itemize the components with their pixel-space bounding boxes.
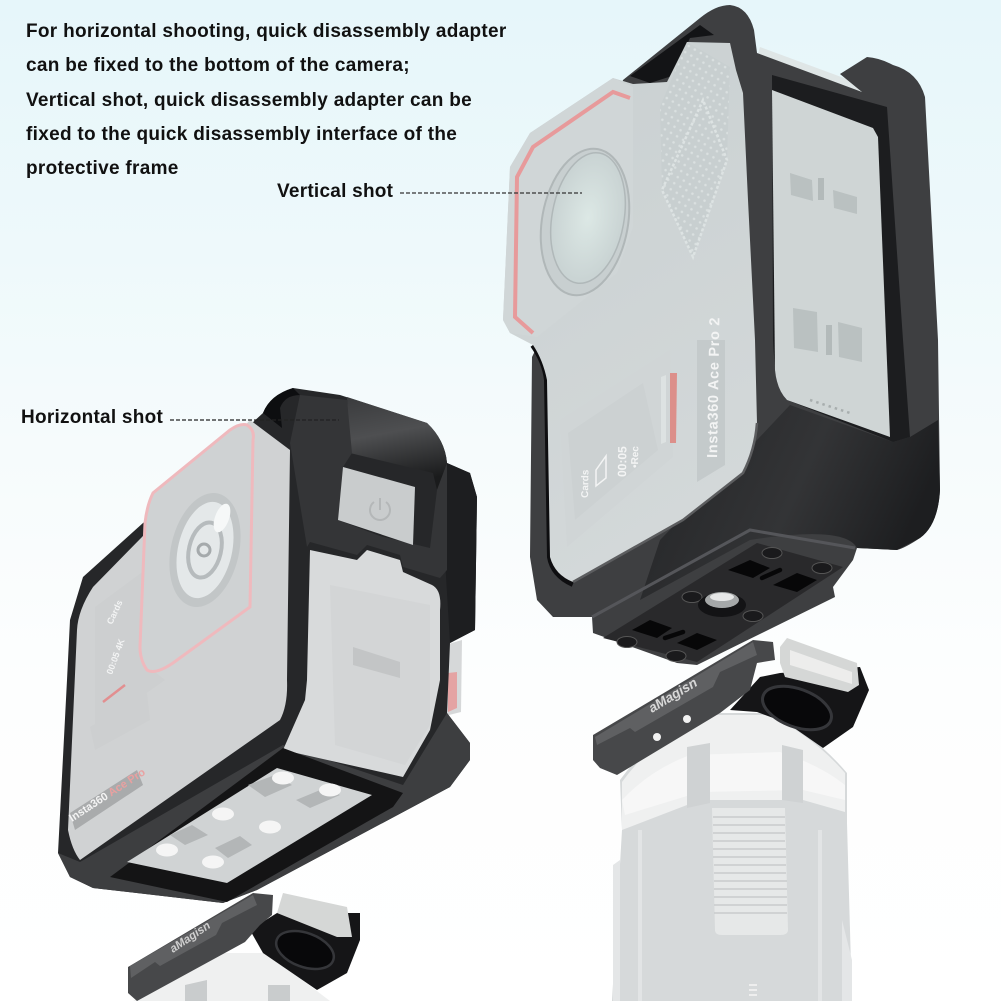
- intro text block: Vertical shot, quick disassembly adapter can be: [26, 90, 472, 111]
- protective frame, vertical: [530, 5, 940, 665]
- front face: [68, 420, 290, 860]
- tripod head under horizontal camera: [133, 953, 330, 1001]
- power button: [338, 467, 415, 545]
- intro text block: can be fixed to the bottom of the camera;: [26, 55, 410, 76]
- label: horizontal shot: Horizontal shot: [21, 407, 163, 428]
- camera body, horizontal: [67, 420, 440, 902]
- intro text block: protective frame: [26, 158, 179, 179]
- mesh grille: [660, 42, 730, 257]
- leader line: horizontal shot: [170, 419, 339, 421]
- adapter brand label, horizontal: aMagisn: [168, 920, 213, 955]
- screen time text: 00:05 4K: [104, 637, 127, 676]
- horizontal shot camera assembly: [58, 388, 477, 1001]
- camera body, vertical: [503, 42, 757, 584]
- screen card text: Cards: [580, 469, 592, 498]
- hinge barrel: [347, 397, 447, 490]
- vertical shot camera assembly: [503, 5, 940, 1001]
- protective frame, horizontal: [58, 388, 477, 903]
- intro text block: fixed to the quick disassembly interface of the: [26, 124, 457, 145]
- quick release adapter, horizontal: [128, 893, 360, 1001]
- label: vertical shot: Vertical shot: [277, 181, 393, 202]
- lens module, horizontal: [140, 425, 253, 671]
- screen record text: •Rec: [630, 446, 641, 468]
- adapter brand label: aMagisn: [646, 675, 700, 716]
- leader line: vertical shot: [400, 192, 582, 194]
- mounting plate: [592, 530, 855, 662]
- brand label: Insta360 Ace Pro: [67, 766, 148, 825]
- intro text block: [26, 21, 507, 179]
- screen text: Cards: [105, 598, 125, 626]
- intro text block: For horizontal shooting, quick disassembly adapter: [26, 21, 507, 42]
- screen text: 00:05: [615, 446, 630, 477]
- tripod head under vertical camera: [612, 713, 852, 1001]
- camera brand label: Insta360 Ace Pro 2: [705, 317, 723, 458]
- camera details panel: [560, 350, 673, 547]
- quick release adapter, vertical: [593, 638, 869, 775]
- bottom plate: [110, 748, 403, 902]
- lens module: [503, 78, 633, 337]
- brand label strip: [697, 340, 725, 482]
